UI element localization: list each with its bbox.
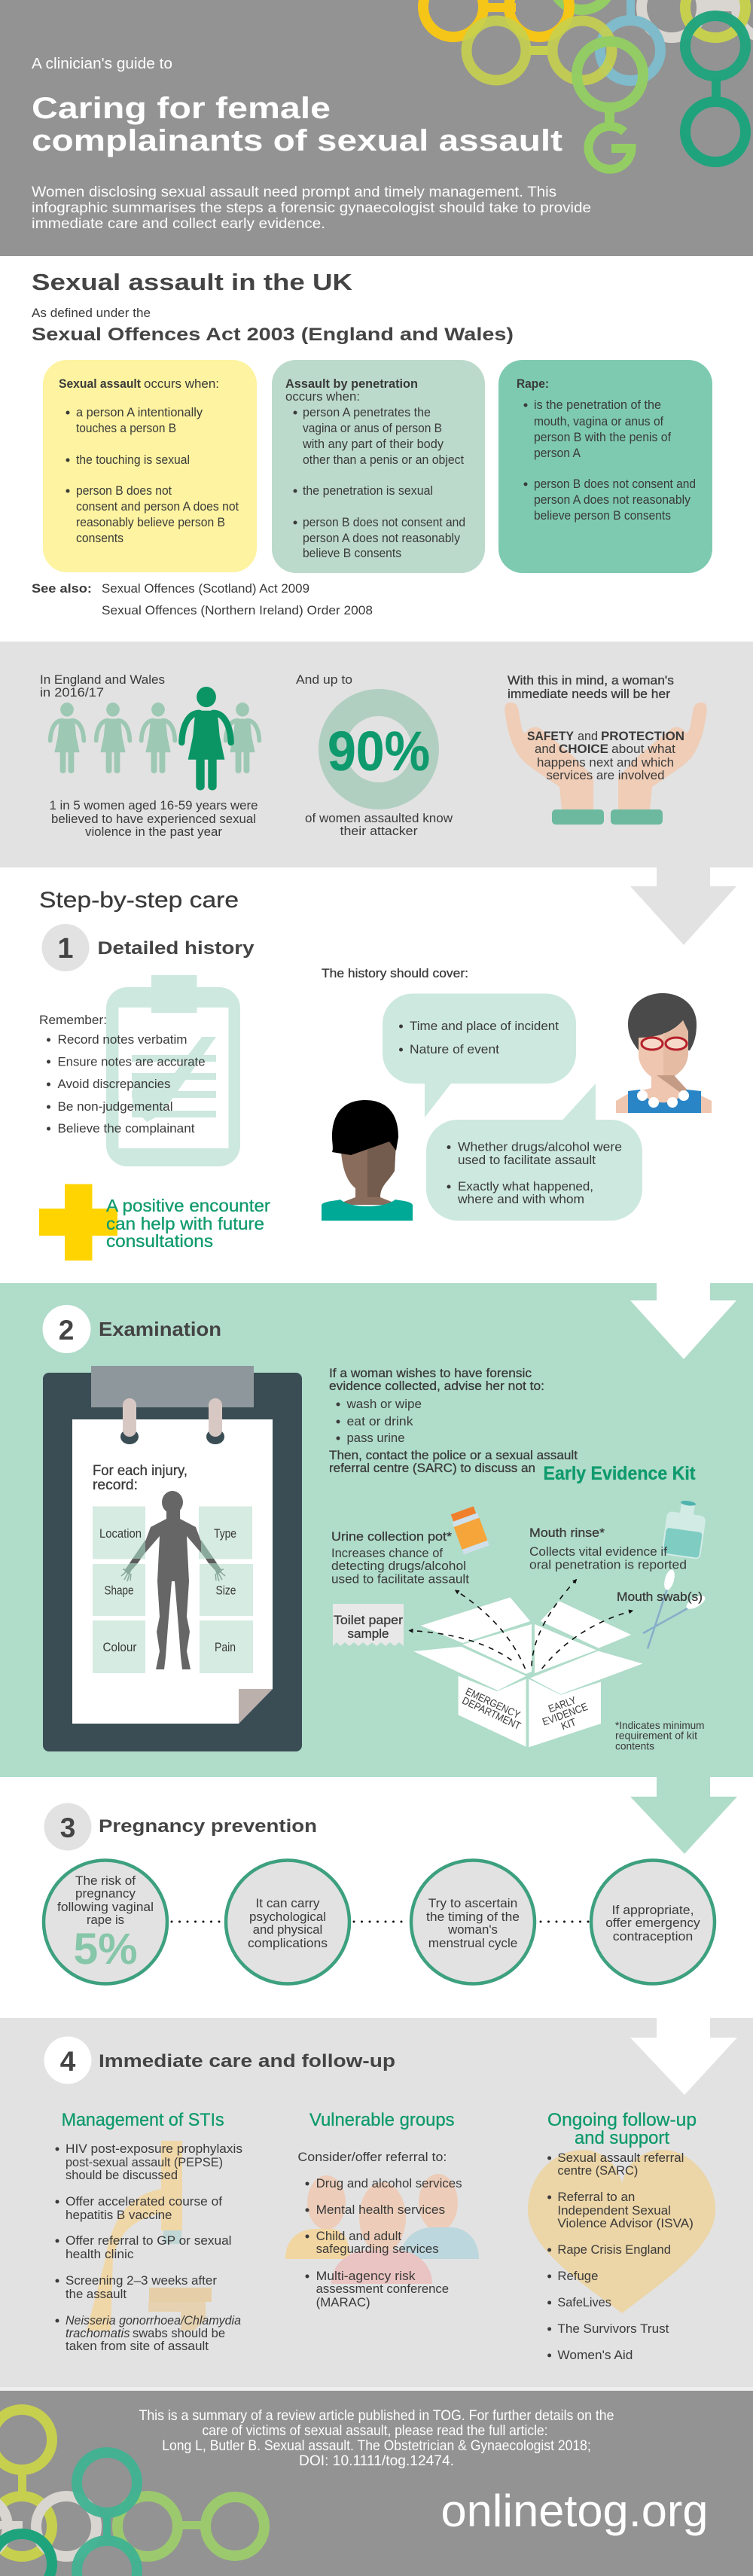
kit: urine collection pot <box>331 1506 489 1586</box>
icon: tap background <box>87 2141 212 2331</box>
circle: menstrual cycle: menstrual cycle <box>428 1936 517 1950</box>
circle: complications: and physical <box>253 1922 322 1937</box>
column: management of STIs: Management of STIs <box>62 2110 224 2130</box>
needs with hands: PROTECTION <box>601 729 684 743</box>
intro paragraph: immediate care and collect early evidence. <box>32 215 325 232</box>
circle: menstrual cycle: Try to ascertain <box>428 1896 517 1910</box>
column: vulnerable groups: Mental health services <box>316 2203 445 2217</box>
card: assault by penetration: with any part of their body <box>302 437 444 451</box>
card: sexual assault: consent and person A does not <box>76 499 239 514</box>
citation: Long L, Butler B. Sexual assault. The Obstetrician & Gynaecologist 2018; <box>162 2438 591 2454</box>
circle: risk: rape is <box>87 1913 124 1927</box>
citation: care of victims of sexual assault, please read the full article: <box>202 2423 548 2439</box>
circle: risk <box>44 1860 167 1983</box>
icon: evidence kit box <box>410 1580 643 1747</box>
column: vulnerable groups: assessment conference <box>316 2282 449 2296</box>
column: ongoing follow-up: Referral to an <box>557 2190 635 2204</box>
card: sexual assault: a person A intentionally <box>76 405 203 419</box>
step 2 badge: 2 <box>59 1315 74 1346</box>
kit: mouth rinse: oral penetration is reported <box>529 1557 687 1572</box>
column: ongoing follow-up: Sexual assault referral <box>557 2151 684 2165</box>
column: ongoing follow-up: Rape Crisis England <box>557 2242 671 2257</box>
icon: evidence kit box: EVIDENCE <box>541 1700 590 1728</box>
column: management of STIs: HIV post-exposure prophylaxis <box>66 2142 242 2156</box>
circle: risk: pregnancy <box>75 1886 136 1901</box>
needs with hands: and <box>535 742 556 756</box>
column: vulnerable groups: safeguarding services <box>316 2242 439 2256</box>
kit: urine collection pot: detecting drugs/alcohol <box>331 1559 466 1573</box>
panel: statistics <box>0 642 753 867</box>
circle: complications <box>226 1860 349 1983</box>
step 4 badge: 4 <box>60 2046 76 2077</box>
step 3 badge <box>44 1803 92 1851</box>
column: ongoing follow-up: Refuge <box>557 2269 598 2283</box>
forensic advice: Then, contact the police or a sexual assault <box>329 1448 578 1462</box>
see also: Sexual Offences (Northern Ireland) Order 2008 <box>102 603 373 617</box>
forensic advice: evidence collected, advise her not to: <box>329 1379 544 1393</box>
panel: step 3 pregnancy prevention <box>44 1803 715 1983</box>
clipboard <box>43 1366 302 1751</box>
column: management of STIs: swabs should be <box>133 2326 225 2340</box>
icon: pot <box>450 1506 489 1555</box>
kit: toilet paper sample <box>333 1604 404 1646</box>
footnote: contents <box>615 1739 654 1751</box>
step 3 badge: 3 <box>60 1812 75 1843</box>
column: ongoing follow-up: Independent Sexual <box>557 2203 671 2218</box>
card: assault by penetration: the penetration is sexual <box>303 483 433 498</box>
stat: 1 in 5 women: in 2016/17 <box>40 685 104 700</box>
dotted connectors <box>172 1920 589 1923</box>
callout: positive encounter: consultations <box>106 1231 213 1251</box>
clipboard: Pain <box>215 1640 236 1654</box>
remember list: Record notes verbatim <box>57 1032 187 1047</box>
arrow: mint down <box>630 1777 737 1854</box>
card: assault by penetration: person B does not consent and <box>303 515 465 529</box>
card: assault by penetration: other than a penis or an object <box>303 453 464 467</box>
stat: 90 percent: And up to <box>296 672 352 687</box>
column: vulnerable groups: Drug and alcohol services <box>316 2176 462 2190</box>
icon: clinician <box>616 993 712 1113</box>
callout: positive encounter: A positive encounter <box>106 1196 270 1215</box>
stat: 90 percent: their attacker <box>340 824 418 838</box>
circle: contraception: offer emergency <box>605 1916 700 1930</box>
clipboard: Type <box>214 1526 236 1541</box>
column: management of STIs <box>56 2110 242 2353</box>
card: assault by penetration: Assault by penetration <box>285 376 418 391</box>
website: onlinetog.org <box>441 2486 708 2536</box>
card: sexual assault: consents <box>76 531 123 545</box>
column: management of STIs: should be discussed <box>66 2168 178 2182</box>
column: ongoing follow-up: and support <box>575 2128 669 2148</box>
speech bubble: details <box>426 1084 642 1221</box>
card: rape: is the penetration of the <box>534 398 661 412</box>
subheading: As defined under the <box>32 306 151 320</box>
stat: 1 in 5 women: 1 in 5 women aged 16-59 years were <box>50 798 258 812</box>
clipboard: record: <box>93 1477 138 1493</box>
icon: complainant <box>322 1100 413 1221</box>
card: rape <box>498 360 712 573</box>
circle: complications: psychological <box>249 1910 326 1924</box>
see also: Sexual Offences (Scotland) Act 2009 <box>102 581 309 596</box>
circle: menstrual cycle: woman's <box>447 1922 498 1937</box>
circle: menstrual cycle <box>411 1860 535 1983</box>
column: management of STIs: the assault <box>66 2287 127 2301</box>
heading: Sexual assault in the UK <box>32 269 353 295</box>
circle: contraception: contraception <box>613 1929 693 1943</box>
speech bubble: details: used to facilitate assault <box>458 1153 596 1167</box>
step 4 badge <box>44 2036 92 2084</box>
arrow: grey down <box>630 867 736 945</box>
icon: bottle <box>661 1498 708 1559</box>
clipboard: Shape <box>104 1583 134 1598</box>
intro paragraph: infographic summarises the steps a forensic gynaecologist should take to provide <box>32 200 591 216</box>
forensic advice: wash or wipe <box>346 1397 422 1411</box>
callout: positive encounter <box>106 1196 270 1251</box>
section heading: Step-by-step care <box>39 888 239 913</box>
kit: mouth swabs: Mouth swab(s) <box>617 1590 703 1604</box>
paper fold <box>239 1689 273 1724</box>
step 1 badge <box>42 924 89 971</box>
footnote <box>615 1719 705 1751</box>
column: ongoing follow-up: centre (SARC) <box>557 2163 638 2178</box>
kit: mouth rinse: Mouth rinse* <box>529 1526 605 1540</box>
needs with hands: SAFETY <box>527 729 575 743</box>
remember list: Remember: <box>39 1013 107 1027</box>
citation: DOI: 10.1111/tog.12474. <box>299 2453 454 2469</box>
needs with hands: CHOICE <box>559 742 608 756</box>
callout: positive encounter: can help with future <box>106 1214 264 1233</box>
card: assault by penetration: occurs when: <box>285 389 360 404</box>
arrow: white down <box>630 1283 736 1359</box>
step 3 title: Pregnancy prevention <box>99 1816 317 1837</box>
card: sexual assault: the touching is sexual <box>76 453 190 467</box>
remember list <box>39 1013 205 1136</box>
forensic advice: referral centre (SARC) to discuss an <box>329 1461 535 1475</box>
intro paragraph: Women disclosing sexual assault need prompt and timely management. This <box>32 184 556 200</box>
card: rape: Rape: <box>517 376 549 391</box>
card: sexual assault: occurs when: <box>144 376 219 391</box>
speech bubble: incident: Time and place of incident <box>410 1019 559 1033</box>
card: assault by penetration <box>272 360 485 573</box>
speech bubble: details: Whether drugs/alcohol were <box>458 1140 622 1154</box>
kit: mouth rinse: Collects vital evidence if <box>529 1544 667 1559</box>
icon: evidence kit box: EMERGENCY <box>464 1685 523 1721</box>
dashed arrows <box>410 1580 633 1669</box>
column: ongoing follow-up: The Survivors Trust <box>557 2321 669 2336</box>
column: ongoing follow-up: Women's Aid <box>557 2348 633 2362</box>
icon: people background <box>285 2174 479 2284</box>
kicker: A clinician's guide to <box>32 56 172 72</box>
column: management of STIs: health clinic <box>66 2247 134 2261</box>
column: management of STIs: Offer accelerated course of <box>66 2194 222 2209</box>
icon: evidence kit box: EARLY <box>547 1693 578 1715</box>
card: assault by penetration: believe B consents <box>303 546 401 560</box>
stat: 1 in 5 women: violence in the past year <box>85 825 222 839</box>
column: management of STIs: Screening 2–3 weeks after <box>66 2273 217 2288</box>
history heading: The history should cover: <box>322 966 468 980</box>
circle: contraception <box>591 1860 715 1983</box>
column: ongoing follow-up: Ongoing follow-up <box>547 2110 697 2130</box>
needs with hands: about what <box>611 742 675 756</box>
act name: Sexual Offences Act 2003 (England and Wales) <box>32 325 514 345</box>
panel: footer <box>0 2391 753 2576</box>
column: management of STIs: taken from site of assault <box>66 2339 209 2353</box>
title: Caring for female <box>32 92 331 125</box>
circle: menstrual cycle: the timing of the <box>426 1910 520 1924</box>
column: vulnerable groups: Vulnerable groups <box>309 2110 455 2130</box>
column: management of STIs: Offer referral to GP or sexual <box>66 2233 232 2248</box>
kit: mouth swabs <box>617 1568 707 1649</box>
kit: urine collection pot: used to facilitate assault <box>331 1572 469 1586</box>
circle: risk: 5% <box>74 1925 137 1974</box>
column: ongoing follow-up: SafeLives <box>557 2295 611 2309</box>
forensic advice: pass urine <box>346 1431 405 1445</box>
stat: 1 in 5 women: believed to have experienced sexual <box>51 812 256 826</box>
kit: urine collection pot: Urine collection pot* <box>331 1529 452 1544</box>
column: vulnerable groups: Child and adult <box>316 2229 401 2243</box>
needs with hands: and <box>578 729 598 743</box>
column: vulnerable groups: Multi-agency risk <box>316 2269 416 2283</box>
panel: sexual assault in the UK <box>32 269 712 617</box>
stat: 90 percent <box>296 672 453 838</box>
panel: step 4 immediate care <box>0 2018 753 2391</box>
icon: body silhouette <box>121 1491 225 1669</box>
step 1 badge: 1 <box>57 933 74 965</box>
kit: toilet paper sample: sample <box>348 1626 389 1641</box>
needs with hands <box>505 673 707 825</box>
column: ongoing follow-up <box>528 2110 715 2362</box>
speech bubble: incident: Nature of event <box>410 1042 499 1056</box>
footnote: requirement of kit <box>615 1729 697 1741</box>
circle: risk: The risk of <box>75 1873 136 1888</box>
card: rape: person A <box>534 446 581 460</box>
stat: 90 percent: 90% <box>328 720 430 782</box>
column: vulnerable groups: (MARAC) <box>316 2295 370 2309</box>
citation <box>139 2408 614 2469</box>
logo rings <box>423 0 753 169</box>
card: rape: mouth, vagina or anus of <box>534 414 663 428</box>
speech bubble: incident <box>383 994 576 1117</box>
card: rape: believe person B consents <box>534 508 671 523</box>
clipboard: Size <box>215 1583 236 1598</box>
icon: yellow plus <box>39 1184 117 1261</box>
step 2 badge <box>42 1305 90 1353</box>
speech bubble: details: Exactly what happened, <box>458 1179 593 1193</box>
panel: step 1 detailed history <box>39 888 712 1261</box>
icon: clipboard <box>106 975 240 1166</box>
column: management of STIs: Neisseria gonorrhoea/Chlamydia <box>66 2313 241 2328</box>
column: vulnerable groups <box>285 2110 479 2309</box>
icon: heart background <box>528 2150 715 2313</box>
kit: toilet paper sample: Toilet paper <box>334 1613 403 1627</box>
card: assault by penetration: person A penetrates the <box>303 405 431 419</box>
circle: complications: It can carry <box>256 1896 320 1910</box>
circle: risk: following vaginal <box>57 1900 154 1914</box>
card: rape: person B with the penis of <box>534 430 671 444</box>
stat: 1 in 5 women: In England and Wales <box>40 672 165 687</box>
forensic advice <box>329 1366 696 1484</box>
stat: 1 in 5 women <box>40 672 259 839</box>
column: ongoing follow-up: Violence Advisor (ISVA) <box>557 2216 694 2230</box>
footer rings <box>0 2410 264 2576</box>
speech bubble: details: where and with whom <box>457 1192 584 1206</box>
needs with hands: services are involved <box>547 768 664 782</box>
remember list: Avoid discrepancies <box>57 1077 170 1091</box>
footnote: *Indicates minimum <box>615 1719 705 1731</box>
needs with hands: happens next and which <box>537 755 674 770</box>
kit: urine collection pot: Increases chance of <box>331 1546 443 1560</box>
panel: header <box>0 0 753 256</box>
intro paragraph <box>32 184 591 232</box>
card: sexual assault: person B does not <box>76 483 172 498</box>
injury tiles <box>93 1506 253 1673</box>
remember list: Believe the complainant <box>57 1121 195 1136</box>
needs with hands: With this in mind, a woman's <box>508 673 674 687</box>
card: rape: person B does not consent and <box>534 477 696 491</box>
card: assault by penetration: person A does not reasonably <box>303 531 460 545</box>
card: rape: person A does not reasonably <box>534 492 691 507</box>
column: management of STIs: trachomatis <box>66 2326 130 2340</box>
icon: evidence kit box: DEPARTMENT <box>460 1694 523 1732</box>
clipboard: Colour <box>102 1640 137 1654</box>
step 4 title: Immediate care and follow-up <box>99 2051 395 2071</box>
title <box>32 92 562 157</box>
forensic advice: Early Evidence Kit <box>544 1463 696 1484</box>
step 1 title: Detailed history <box>98 938 255 959</box>
needs with hands: immediate needs will be her <box>508 687 670 701</box>
forensic advice: eat or drink <box>346 1414 413 1428</box>
paper <box>72 1419 273 1724</box>
card: assault by penetration: vagina or anus of person B <box>303 421 442 435</box>
step 2 title: Examination <box>99 1318 221 1340</box>
title: complainants of sexual assault <box>32 124 562 157</box>
column: management of STIs: post-sexual assault (PEPSE) <box>66 2155 223 2169</box>
icon: evidence kit box: KIT <box>559 1715 578 1732</box>
card: sexual assault: Sexual assault <box>59 376 141 391</box>
remember list: Be non-judgemental <box>57 1099 173 1114</box>
card: sexual assault <box>43 360 257 572</box>
remember list: Ensure notes are accurate <box>57 1054 205 1069</box>
citation: This is a summary of a review article published in TOG. For further details on the <box>139 2408 614 2424</box>
circle: contraception: If appropriate, <box>611 1903 694 1917</box>
column: vulnerable groups: Consider/offer referral to: <box>297 2150 447 2164</box>
stat: 90 percent: of women assaulted know <box>305 811 453 825</box>
arrow: white down <box>630 2018 737 2095</box>
clipboard: Location <box>99 1526 142 1541</box>
see also: See also: <box>32 581 92 596</box>
card: sexual assault: reasonably believe person B <box>76 515 225 529</box>
card: sexual assault: touches a person B <box>76 421 176 435</box>
see also <box>32 581 373 617</box>
clipboard: For each injury, <box>93 1463 187 1479</box>
panel: step 2 examination <box>0 1283 753 1777</box>
circle: complications: complications <box>248 1936 328 1950</box>
column: management of STIs: hepatitis B vaccine <box>66 2208 172 2222</box>
kit: mouth rinse <box>529 1498 708 1572</box>
forensic advice: If a woman wishes to have forensic <box>329 1366 532 1380</box>
